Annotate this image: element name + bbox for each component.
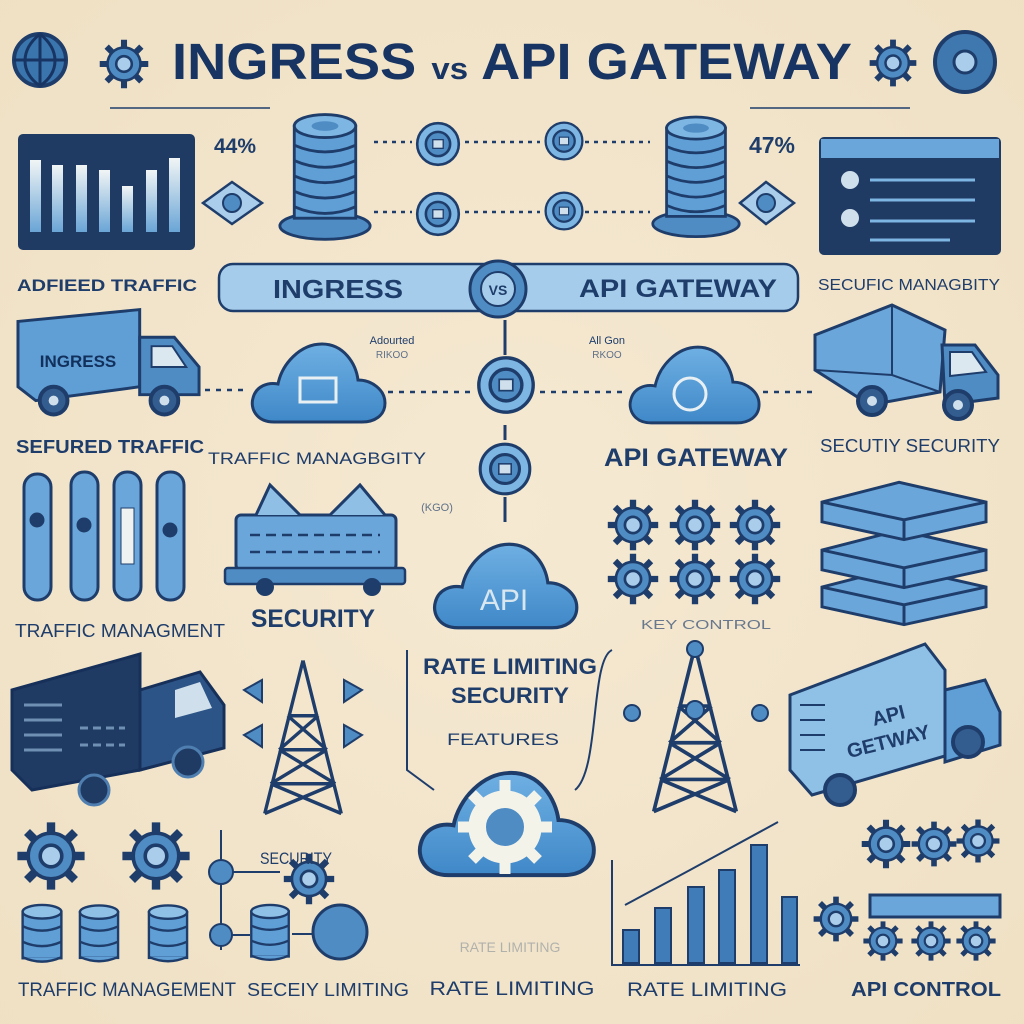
icon: stacked crates: [822, 482, 986, 625]
label: SECEIY LIMITING: [247, 980, 409, 1000]
icon: globe: [14, 34, 66, 86]
icon: ingress truck: INGRESS: [40, 352, 116, 371]
small label: RKOO: [592, 350, 622, 361]
security diagram: SECURITY: [260, 849, 332, 868]
label: ADFIEED TRAFFIC: [17, 276, 197, 295]
banner: ingress vs api gateway: INGRESS: [273, 274, 403, 304]
icon: gears left: [17, 822, 190, 890]
small label: RIKOO: [376, 350, 408, 361]
label: KEY CONTROL: [641, 617, 771, 632]
banner: ingress vs api gateway: [219, 261, 798, 317]
icon: cloud left: [252, 344, 385, 422]
icon: api gateway truck: [790, 644, 1000, 805]
icon: databases: [23, 905, 187, 962]
small label: All Gon: [589, 335, 625, 347]
label: SEFURED TRAFFIC: [16, 437, 204, 457]
panel: dashboard window: [819, 137, 1001, 255]
label: TRAFFIC MANAGMENT: [15, 621, 225, 641]
label: SECURITY: [451, 683, 569, 708]
banner: ingress vs api gateway: API GATEWAY: [579, 275, 777, 303]
label: TRAFFIC MANAGBGITY: [208, 449, 426, 468]
icon: dark truck: [12, 654, 224, 805]
icon: eye left: [203, 182, 262, 224]
icon: header gear left: [100, 40, 148, 88]
bar chart: [612, 822, 800, 965]
stat right: 47%: [749, 132, 795, 158]
icon: header gear right: [870, 40, 916, 86]
small label: Adourted: [370, 335, 414, 347]
icon: features cloud with gear: [420, 773, 594, 875]
connector lines: [205, 390, 812, 392]
icon: ingress truck: [18, 310, 199, 414]
faint label: RATE LIMITING: [460, 939, 560, 955]
icon: tower left: [244, 660, 362, 814]
security diagram: [209, 830, 367, 960]
label: API GATEWAY: [604, 444, 788, 472]
icon: eye right: [740, 182, 794, 224]
label: RATE LIMITING: [627, 980, 787, 1001]
title: INGRESS vs API GATEWAY: [172, 33, 852, 90]
icon: sliders: [24, 472, 184, 600]
icon: cloud right: [630, 347, 759, 423]
icon: server stack right: [653, 117, 739, 237]
icon: api cloud: API: [480, 584, 528, 617]
label: SECUFIC MANAGBITY: [818, 277, 1000, 294]
icon: gears grid: [608, 500, 780, 604]
small label: (KGO): [421, 502, 453, 514]
label: SECUTIY SECURITY: [820, 436, 1000, 456]
connectors to features cloud: [407, 650, 612, 790]
central pin nodes: [479, 320, 533, 522]
banner: ingress vs api gateway: VS: [489, 282, 507, 298]
label: RATE LIMITING: [430, 979, 594, 1000]
label: FEATURES: [447, 730, 559, 749]
icon: api cloud: [435, 544, 577, 628]
icon: server stack left: [280, 115, 370, 239]
label: TRAFFIC MANAGEMENT: [18, 980, 236, 1001]
stat left: 44%: [214, 135, 256, 158]
panel: dark bar chart: [18, 134, 195, 250]
icon: tower right: [624, 641, 768, 812]
icon: api gateway truck: API: [870, 701, 907, 731]
icon: node row left: [374, 123, 650, 235]
icon: firewall machine: [225, 485, 405, 596]
icon: blue truck right: [815, 305, 998, 419]
label: API CONTROL: [851, 979, 1001, 1001]
icon: api control: [814, 820, 1000, 961]
label: RATE LIMITING: [423, 654, 597, 679]
label: SECURITY: [251, 605, 375, 633]
icon: api gateway truck: GETWAY: [845, 721, 933, 763]
icon: header dial right: [935, 32, 995, 92]
